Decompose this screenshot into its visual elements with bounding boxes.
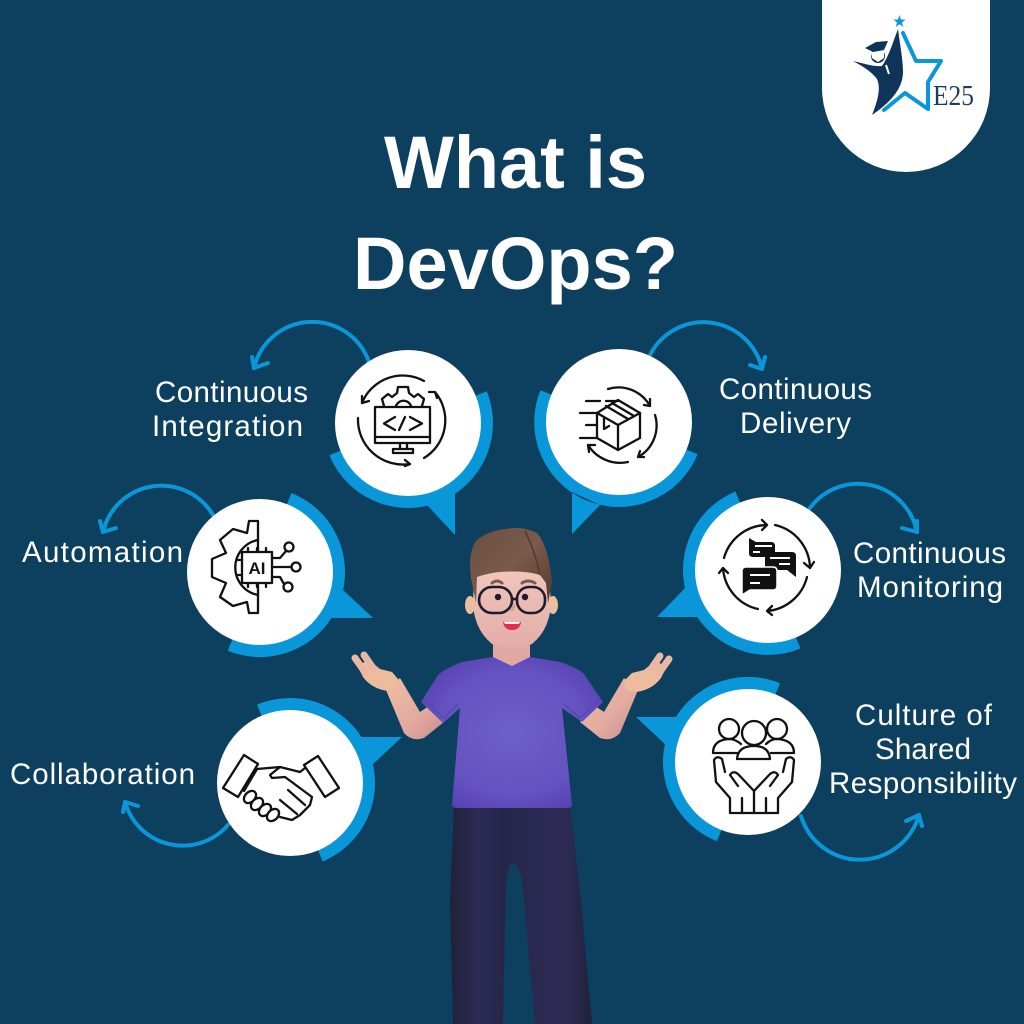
ring with pointer — [657, 492, 800, 655]
trousers — [450, 806, 592, 1024]
label line: Delivery — [740, 407, 851, 440]
ring with pointer — [636, 677, 780, 841]
bubble — [765, 552, 796, 577]
white circle — [675, 689, 821, 835]
white circle — [187, 499, 333, 645]
ring with pointer — [329, 391, 493, 535]
panel: automation — [22, 486, 373, 657]
icon: AI gear — [212, 521, 300, 613]
fingers — [651, 656, 669, 673]
title — [353, 121, 678, 305]
icon: graduate head — [871, 49, 885, 63]
eyebrows — [492, 581, 535, 583]
bubble — [749, 538, 775, 557]
label line: Culture of — [855, 699, 993, 732]
teeth — [504, 622, 520, 624]
label — [829, 699, 1017, 800]
label — [853, 537, 1006, 604]
icon: star outline — [884, 33, 941, 110]
neck — [493, 640, 530, 668]
right arm — [580, 678, 638, 739]
illustration: person — [355, 528, 669, 1024]
label — [152, 376, 308, 443]
ring with pointer — [257, 698, 402, 862]
eyes — [495, 594, 501, 600]
label line: Monitoring — [857, 571, 1003, 604]
panel: culture of shared responsibility — [636, 677, 1017, 860]
bubble lines — [750, 546, 790, 583]
palm — [358, 659, 399, 691]
icon: code monitor with gear — [358, 376, 445, 466]
icon: graduate figure — [853, 29, 903, 115]
panel: collaboration — [10, 698, 402, 862]
logo text: E25 — [933, 81, 974, 112]
ring with pointer — [228, 493, 373, 657]
icon: chat bubbles — [742, 538, 796, 595]
nose — [509, 602, 515, 612]
badge shape — [822, 0, 990, 172]
label: Automation — [22, 536, 183, 569]
white circle — [217, 710, 363, 856]
label line: Responsibility — [829, 767, 1017, 800]
right hand — [624, 656, 669, 692]
white circle — [695, 497, 841, 643]
label line: Continuous — [853, 537, 1006, 570]
icon: small star — [894, 15, 906, 27]
white circle — [335, 350, 481, 496]
label line: Integration — [152, 410, 303, 443]
label line: Continuous — [155, 376, 308, 409]
bubble — [742, 567, 777, 595]
white circle — [546, 349, 692, 495]
title line 1: What is — [384, 121, 647, 204]
icon: chat cycle — [719, 520, 814, 615]
hair parting — [525, 531, 540, 575]
curved arrow — [810, 484, 917, 532]
panel: continuous delivery — [534, 322, 872, 534]
curved arrow — [801, 815, 922, 860]
icon text: AI — [248, 559, 266, 578]
icon: package delivery — [580, 387, 657, 463]
curved arrow — [650, 322, 765, 369]
label: Collaboration — [10, 758, 195, 791]
panel: continuous monitoring — [657, 484, 1006, 655]
icon: people and hands — [713, 719, 794, 813]
label — [719, 373, 872, 440]
face — [473, 570, 551, 648]
label line: Continuous — [719, 373, 872, 406]
palm — [624, 660, 666, 692]
icon: tie — [886, 65, 889, 74]
title line 2: DevOps? — [353, 222, 678, 305]
icon: face — [871, 50, 884, 62]
curved arrow — [252, 322, 369, 368]
fingers — [355, 655, 373, 672]
curved arrow — [100, 486, 213, 532]
logo badge — [822, 0, 990, 172]
mouth — [503, 622, 521, 630]
curved arrow — [123, 802, 228, 846]
left hand — [355, 655, 399, 691]
glasses — [479, 587, 545, 613]
icon: graduation cap — [865, 41, 888, 52]
left arm — [386, 678, 444, 739]
hair — [470, 528, 552, 603]
shirt — [421, 657, 603, 808]
ring with pointer — [534, 390, 698, 534]
sleeve cuffs — [424, 700, 600, 718]
icon: handshake — [223, 755, 339, 823]
ears — [465, 596, 475, 614]
label line: Shared — [875, 733, 971, 766]
panel: continuous integration — [152, 322, 493, 535]
head — [465, 528, 558, 648]
